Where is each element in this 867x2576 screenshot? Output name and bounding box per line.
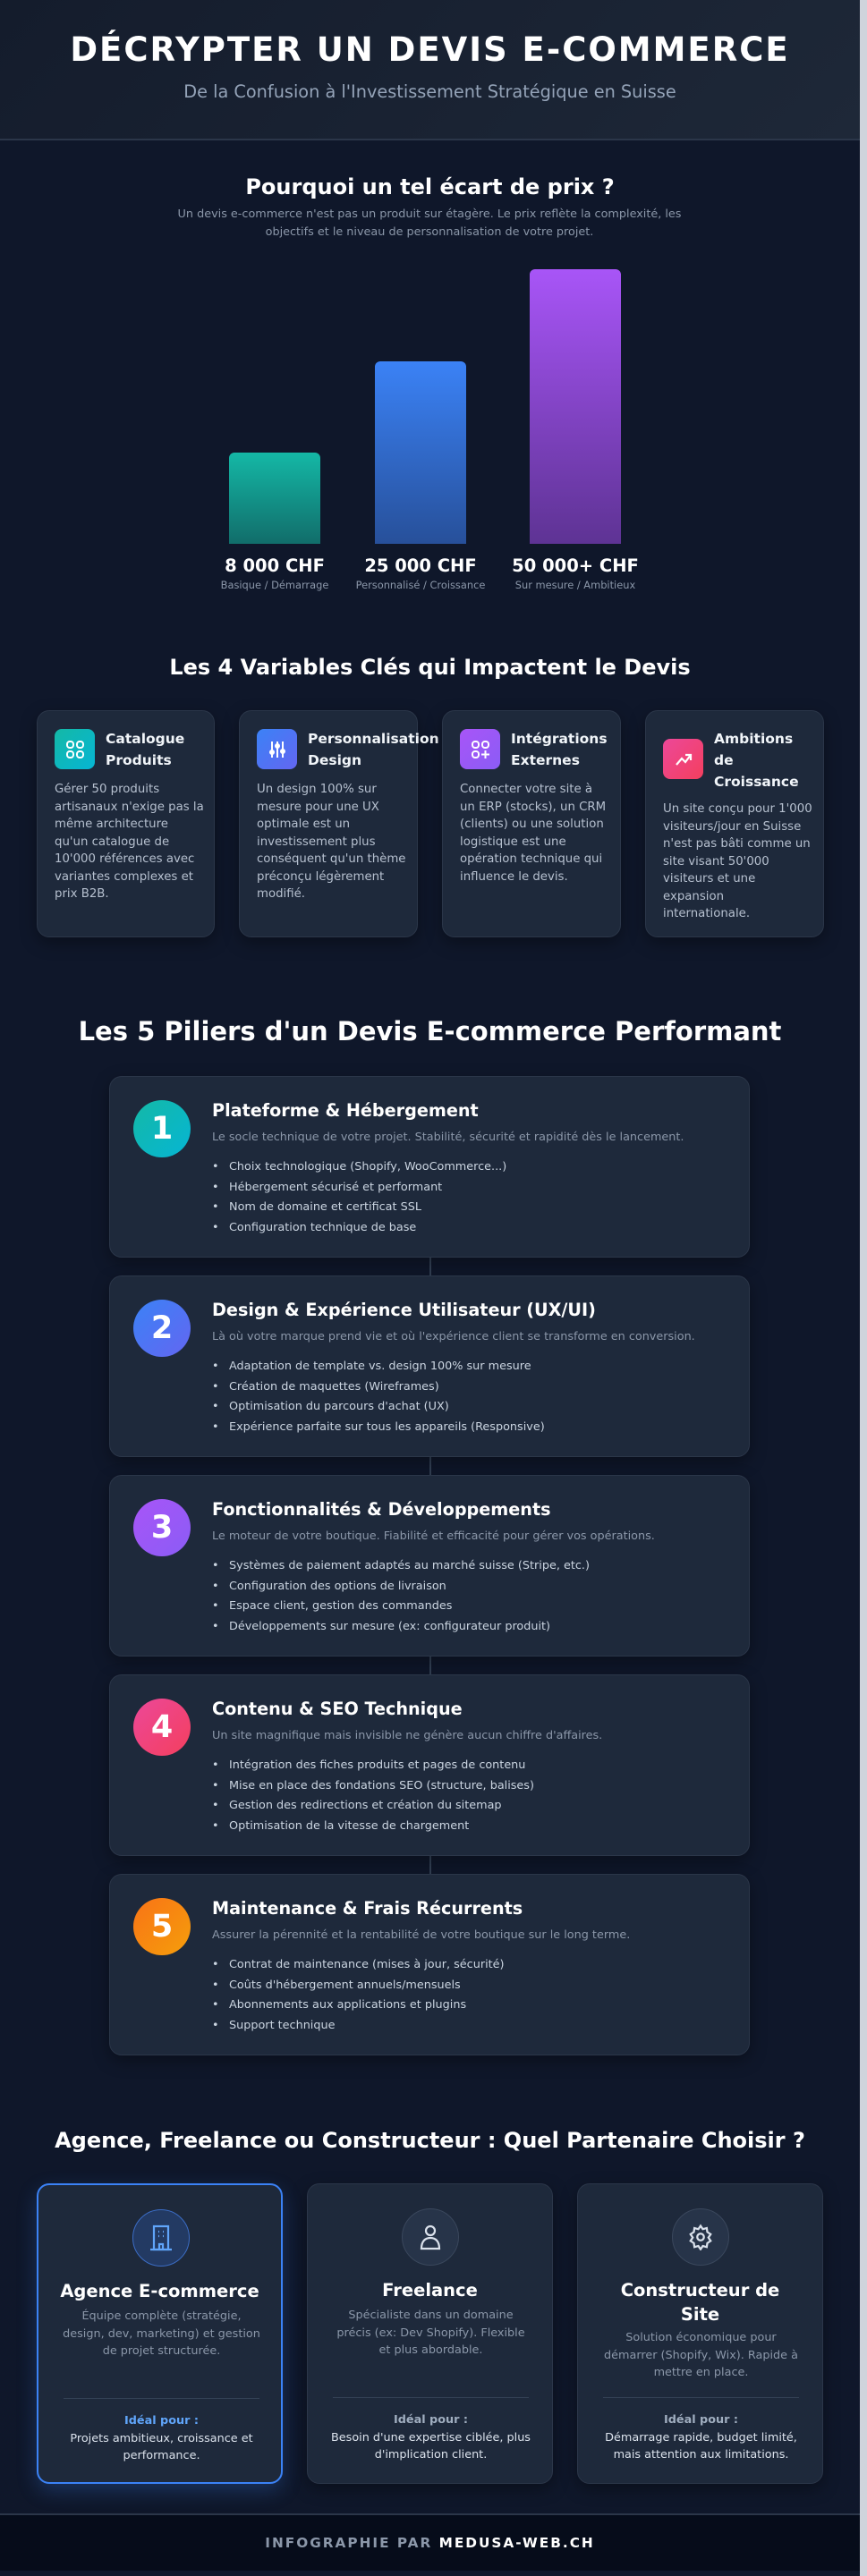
header <box>0 0 867 140</box>
list: Systèmes de paiement adaptés au marché suisse (Stripe, etc.) <box>229 1559 590 1572</box>
label: 8000 <box>221 555 328 591</box>
pillar 2 <box>109 1275 750 1457</box>
badge 1: 1 <box>151 1111 173 1147</box>
footer: INFOGRAPHIE PAR MEDUSA-WEB.CH <box>265 2535 595 2551</box>
list <box>213 1958 505 2032</box>
panel: design <box>239 710 418 937</box>
ideal for: Projets ambitieux, croissance et performance. <box>70 2431 253 2462</box>
intro paragraph: Un devis e-commerce n'est pas un produit sur étagère. Le prix reflète la complexité, les objectifs et le niveau de personnalisation de votre projet. <box>178 208 681 238</box>
label: 25000: Personnalisé / Croissance <box>356 579 485 591</box>
ideal for: Besoin d'une expertise ciblée, plus d'implication client. <box>331 2431 531 2462</box>
title <box>621 2280 779 2325</box>
title: Contenu & SEO Technique <box>212 1699 463 1719</box>
section heading: partner: Agence, Freelance ou Constructeur : Quel Partenaire Choisir ? <box>55 2128 805 2153</box>
text: optimale est un <box>257 818 350 831</box>
icon: trend <box>663 739 703 779</box>
badge 4 <box>133 1699 191 1756</box>
text: préconçu légèrement <box>257 869 384 884</box>
text: variantes complexes et <box>55 869 193 884</box>
title: Catalogue <box>106 731 184 747</box>
badge 2: 2 <box>151 1310 173 1346</box>
text: un ERP (stocks), un CRM <box>460 800 606 814</box>
title: Constructeur de <box>621 2280 779 2301</box>
label: 50000: 50 000+ CHF <box>512 555 639 576</box>
title: Intégrations <box>511 731 608 747</box>
badge 3 <box>133 1499 191 1556</box>
text: 10'000 références avec <box>55 852 194 866</box>
list: Expérience parfaite sur tous les appareils (Responsive) <box>229 1420 545 1433</box>
list: Abonnements aux applications et plugins <box>229 1998 466 2012</box>
text <box>460 783 606 884</box>
text: même architecture <box>55 818 168 831</box>
title <box>308 731 439 768</box>
text <box>55 783 204 901</box>
icon: building <box>132 2209 190 2267</box>
title: Design <box>308 752 361 768</box>
title: Produits <box>106 752 172 768</box>
title <box>714 731 799 790</box>
title: Plateforme & Hébergement <box>212 1100 479 1121</box>
bar: 25000 <box>375 361 466 544</box>
title <box>106 731 184 768</box>
list: Intégration des fiches produits et pages de contenu <box>229 1758 525 1772</box>
icon: sliders <box>257 729 297 769</box>
title: Site <box>681 2304 719 2325</box>
ideal for <box>331 2413 531 2462</box>
label: 8000: 8 000 CHF <box>225 555 325 576</box>
title: Croissance <box>714 774 799 790</box>
panel: freelance <box>307 2183 553 2484</box>
panel: ambitions <box>645 710 824 937</box>
list: Optimisation de la vitesse de chargement <box>229 1819 469 1832</box>
title <box>511 731 608 768</box>
text: investissement plus <box>257 835 376 848</box>
text: Un site conçu pour 1'000 <box>663 802 812 816</box>
title: DÉCRYPTER UN DEVIS E-COMMERCE <box>70 30 790 69</box>
badge 2 <box>133 1300 191 1357</box>
list: Support technique <box>229 2018 335 2032</box>
label: 50000 <box>512 555 639 591</box>
text: site visant 50'000 <box>663 855 769 868</box>
badge 3: 3 <box>151 1510 173 1546</box>
text: visiteurs et une <box>663 872 755 886</box>
description: Le moteur de votre boutique. Fiabilité et efficacité pour gérer vos opérations. <box>212 1530 655 1543</box>
panel: catalogue <box>37 710 215 937</box>
text: visiteurs/jour en Suisse <box>663 819 801 834</box>
bar chart <box>221 269 639 591</box>
list: Adaptation de template vs. design 100% sur mesure <box>229 1360 531 1373</box>
pillar 5 <box>109 1874 750 2055</box>
right border strip <box>860 0 867 2576</box>
list: Mise en place des fondations SEO (structure, balises) <box>229 1778 534 1792</box>
ideal for: Idéal pour : <box>394 2413 468 2427</box>
text: Gérer 50 produits <box>55 783 159 796</box>
text: opération technique qui <box>460 852 602 866</box>
description: Équipe complète (stratégie, design, dev, marketing) et gestion de projet structurée. <box>63 2309 260 2358</box>
pillar 4 <box>109 1674 750 1856</box>
list: Configuration technique de base <box>229 1220 416 1234</box>
list: Création de maquettes (Wireframes) <box>229 1379 439 1394</box>
pillar 3 <box>109 1475 750 1657</box>
list <box>213 1559 590 1633</box>
panel: integrations <box>442 710 621 937</box>
bar: 8000 <box>229 453 320 544</box>
text: qu'un catalogue de <box>55 835 169 848</box>
description: Spécialiste dans un domaine précis (ex: Dev Shopify). Flexible et plus abordable. <box>336 2309 525 2357</box>
list <box>213 1360 545 1433</box>
ideal for: Idéal pour : <box>664 2413 738 2427</box>
title: Ambitions <box>714 731 793 747</box>
title: de <box>714 752 734 768</box>
text: expansion <box>663 889 724 903</box>
list: Coûts d'hébergement annuels/mensuels <box>229 1979 461 1991</box>
list: Espace client, gestion des commandes <box>229 1599 452 1613</box>
badge 4: 4 <box>151 1709 173 1745</box>
badge 5: 5 <box>151 1909 173 1945</box>
title: Maintenance & Frais Récurrents <box>212 1898 523 1919</box>
text: logistique est une <box>460 835 566 848</box>
text: internationale. <box>663 907 750 920</box>
panel: agence <box>37 2183 283 2484</box>
subtitle: De la Confusion à l'Investissement Stratégique en Suisse <box>183 81 676 102</box>
ideal for <box>605 2413 797 2462</box>
text <box>663 802 812 920</box>
text: conséquent qu'un thème <box>257 852 405 866</box>
section heading: price gap: Pourquoi un tel écart de prix ? <box>245 174 615 199</box>
description: Solution économique pour démarrer (Shopify, Wix). Rapide à mettre en place. <box>604 2331 798 2379</box>
text: modifié. <box>257 887 305 901</box>
list <box>213 1758 534 1832</box>
list: Développements sur mesure (ex: configurateur produit) <box>229 1619 550 1633</box>
icon: gear <box>672 2208 729 2266</box>
description: Un site magnifique mais invisible ne génère aucun chiffre d'affaires. <box>212 1729 602 1742</box>
list: Configuration des options de livraison <box>229 1580 446 1592</box>
ideal for: Démarrage rapide, budget limité, mais attention aux limitations. <box>605 2431 797 2462</box>
section heading: 4 variables: Les 4 Variables Clés qui Impactent le Devis <box>169 655 691 680</box>
icon: grid <box>55 729 95 769</box>
list: Nom de domaine et certificat SSL <box>229 1200 421 1214</box>
footer <box>0 2513 860 2571</box>
ideal for <box>70 2414 253 2462</box>
pillar 1 <box>109 1076 750 1258</box>
badge 5 <box>133 1898 191 1955</box>
list: Optimisation du parcours d'achat (UX) <box>229 1400 449 1413</box>
panel: constructeur <box>577 2183 823 2484</box>
text: (clients) ou une solution <box>460 818 604 831</box>
badge 1 <box>133 1100 191 1157</box>
text <box>257 783 405 901</box>
bar: 50000 <box>530 269 621 544</box>
description: Le socle technique de votre projet. Stabilité, sécurité et rapidité dès le lancement. <box>212 1131 684 1144</box>
label: 25000: 25 000 CHF <box>364 555 477 576</box>
text: artisanaux n'exige pas la <box>55 800 204 814</box>
label: 25000 <box>356 555 485 591</box>
text: influence le devis. <box>460 869 568 884</box>
list: Choix technologique (Shopify, WooCommerce...) <box>229 1160 506 1174</box>
label: 50000: Sur mesure / Ambitieux <box>515 579 635 591</box>
title: Fonctionnalités & Développements <box>212 1499 551 1520</box>
title: Externes <box>511 752 580 768</box>
label: 8000: Basique / Démarrage <box>221 579 328 591</box>
text: Connecter votre site à <box>460 783 592 796</box>
title: Personnalisation <box>308 731 439 747</box>
text: prix B2B. <box>55 887 109 901</box>
list: Hébergement sécurisé et performant <box>229 1181 442 1193</box>
text: mesure pour une UX <box>257 800 379 814</box>
description: Assurer la pérennité et la rentabilité de votre boutique sur le long terme. <box>212 1928 630 1942</box>
ideal for: Idéal pour : <box>124 2414 199 2428</box>
list: Gestion des redirections et création du sitemap <box>229 1799 502 1812</box>
text: n'est pas bâti comme un <box>663 837 811 851</box>
title: Freelance <box>382 2280 478 2301</box>
icon: person <box>402 2208 459 2266</box>
description: Là où votre marque prend vie et où l'expérience client se transforme en conversion. <box>212 1330 695 1343</box>
title: Agence E-commerce <box>60 2281 259 2301</box>
list <box>213 1160 506 1234</box>
section heading: 5 pillars: Les 5 Piliers d'un Devis E-commerce Performant <box>79 1016 781 1046</box>
connector line <box>429 1163 431 1968</box>
text: Un design 100% sur <box>257 783 377 796</box>
icon: plus grid <box>460 729 500 769</box>
title: Design & Expérience Utilisateur (UX/UI) <box>212 1300 596 1320</box>
list: Contrat de maintenance (mises à jour, sécurité) <box>229 1958 505 1971</box>
